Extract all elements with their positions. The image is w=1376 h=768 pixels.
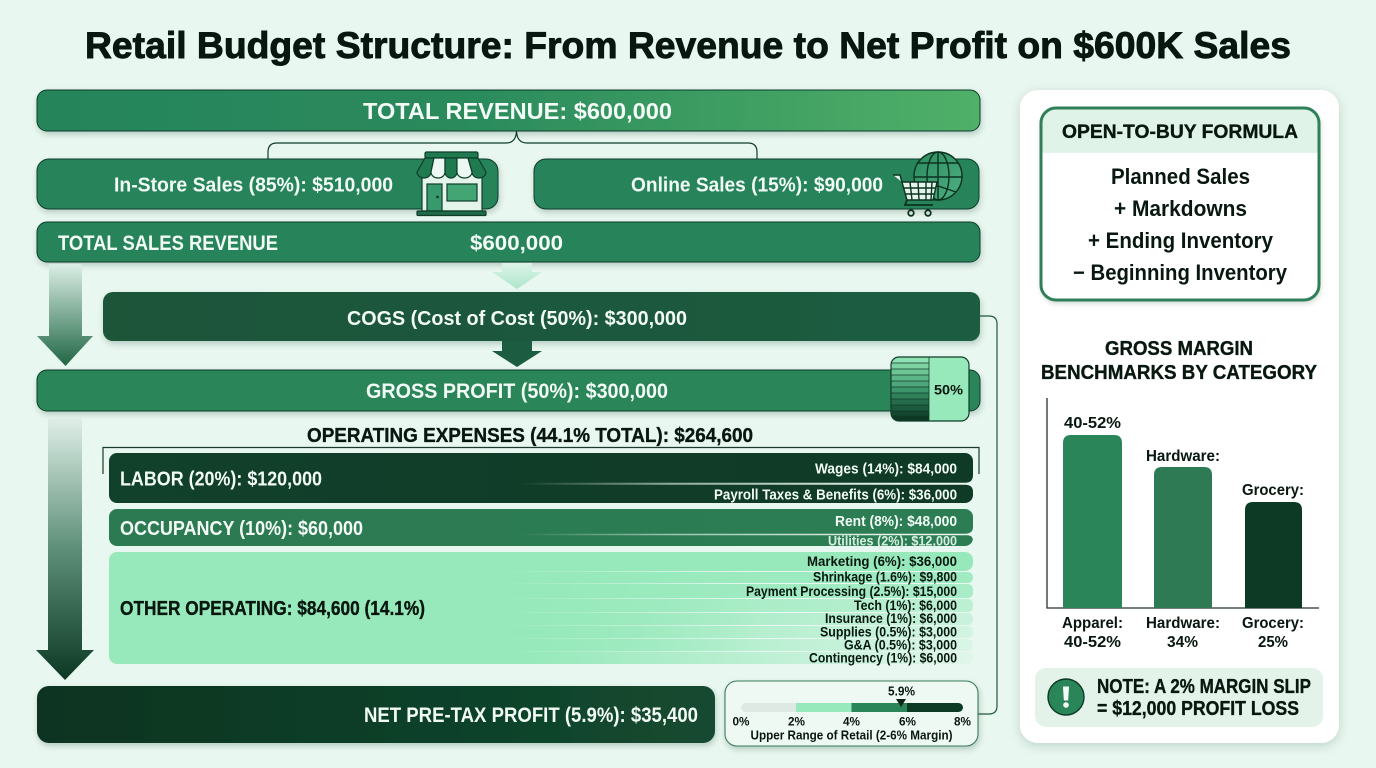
heading: gross margin benchmarks [1041,338,1318,384]
bar chart: gross margin by category: Grocery: [1242,615,1304,632]
icon: exclamation mark [1048,679,1084,715]
chart: net margin gauge: Upper Range of Retail (2-6% Margin) [750,728,952,742]
panel: open-to-buy formula [1041,108,1319,300]
panel: in-store sales bar: In-Store Sales (85%): $510,000 [114,174,393,196]
chart: net margin gauge: 8% [954,714,971,728]
chart: net margin gauge [725,681,978,746]
arrow: light down arrow to COGS [492,263,542,289]
panel: net pre-tax profit bar [37,686,715,743]
bar chart: gross margin by category [1047,398,1319,651]
connector: COGS to net profit gauge [978,316,997,714]
panel: other operating expenses: Contingency (1%): $6,000 [809,650,957,666]
panel: other operating expenses: Marketing (6%): $36,000 [807,553,957,569]
panel: other operating expenses: Shrinkage (1.6%): $9,800 [813,568,957,584]
panel: in-store sales bar [37,159,498,209]
panel: online sales bar [534,159,979,209]
bracket: operating expenses [103,448,979,474]
panel: total revenue bar: TOTAL REVENUE: $600,000 [363,98,672,124]
bar chart: gross margin by category: 34% [1167,634,1198,651]
bar chart: gross margin by category: 40-52% [1064,415,1121,432]
heading: gross margin benchmarks: GROSS MARGIN [1105,338,1253,360]
panel: occupancy expenses: Rent (8%): $48,000 [835,514,957,530]
panel: total revenue bar [37,90,980,131]
bar chart: gross margin by category: Hardware: [1146,615,1220,632]
panel: occupancy expenses: Utilities (2%): $12,000 [828,532,957,548]
panel: total sales revenue bar: TOTAL SALES REVENUE [58,232,278,255]
panel: labor expenses: LABOR (20%): $120,000 [120,468,322,490]
chart: net margin gauge: 4% [843,714,860,728]
panel: open-to-buy formula: − Beginning Inventory [1073,260,1288,285]
panel: right sidebar [1020,90,1339,743]
heading: operating expenses: OPERATING EXPENSES (44.1% TOTAL): $264,600 [307,425,753,447]
panel: gross profit bar: GROSS PROFIT (50%): $300,000 [366,380,668,403]
bar chart: gross margin by category: Grocery: [1242,482,1304,499]
panel: open-to-buy formula: + Ending Inventory [1088,228,1274,253]
panel: other operating expenses: G&A (0.5%): $3,000 [844,636,957,652]
title: Retail Budget Structure: From Revenue to Net Profit on $600K Sales [85,25,1291,66]
arrow: left flow arrow to gross profit [37,264,93,366]
panel: labor expenses [109,453,973,504]
chart: net margin gauge: 2% [788,714,805,728]
panel: labor expenses: Payroll Taxes & Benefits (6%): $36,000 [714,488,957,504]
callout: margin slip note [1035,668,1323,727]
panel: gross profit bar [37,370,980,411]
bracket connector: revenue split [268,131,757,159]
panel: COGS bar [103,292,980,341]
panel: other operating expenses: Payment Processing (2.5%): $15,000 [746,583,957,599]
chart: net margin gauge: 0% [732,714,750,728]
icon: 50% stacked gauge [891,357,969,421]
panel: occupancy expenses: OCCUPANCY (10%): $60,000 [120,518,363,540]
chart: net margin gauge: 5.9% [888,684,915,698]
bar chart: gross margin by category: Hardware: [1146,448,1220,465]
panel: other operating expenses: OTHER OPERATING: $84,600 (14.1%) [120,598,425,620]
panel: net pre-tax profit bar: NET PRE-TAX PROFIT (5.9%): $35,400 [364,704,698,727]
panel: other operating expenses: Supplies (0.5%): $3,000 [820,624,957,640]
arrow: left flow arrow to net profit [36,418,94,680]
icon: storefront [417,152,486,216]
icon: 50% stacked gauge: 50% [934,382,964,398]
icon: globe and shopping cart [893,152,962,216]
heading: gross margin benchmarks: BENCHMARKS BY CATEGORY [1041,362,1318,384]
panel: occupancy expenses [109,509,973,548]
panel: open-to-buy formula: OPEN-TO-BUY FORMULA [1062,122,1298,143]
bar chart: gross margin by category: Apparel: [1062,615,1123,632]
panel: total sales revenue bar: $600,000 [470,232,563,255]
panel: open-to-buy formula: Planned Sales [1111,164,1250,189]
callout: margin slip note: = $12,000 PROFIT LOSS [1097,698,1299,720]
panel: other operating expenses: Insurance (1%): $6,000 [825,610,957,626]
arrow: dark down arrow to gross profit [492,341,542,367]
panel: labor expenses: Wages (14%): $84,000 [815,462,957,478]
bar chart: gross margin by category: 25% [1258,634,1288,651]
panel: online sales bar: Online Sales (15%): $90,000 [631,174,883,196]
panel: COGS bar: COGS (Cost of Cost (50%): $300,000 [347,307,687,330]
panel: total sales revenue bar [37,222,980,262]
panel: open-to-buy formula: + Markdowns [1114,196,1247,221]
panel: other operating expenses [109,552,973,666]
callout: margin slip note: NOTE: A 2% MARGIN SLIP [1097,676,1311,698]
bar chart: gross margin by category: 40-52% [1064,634,1121,651]
chart: net margin gauge: 6% [899,714,916,728]
panel: other operating expenses: Tech (1%): $6,000 [854,597,957,613]
